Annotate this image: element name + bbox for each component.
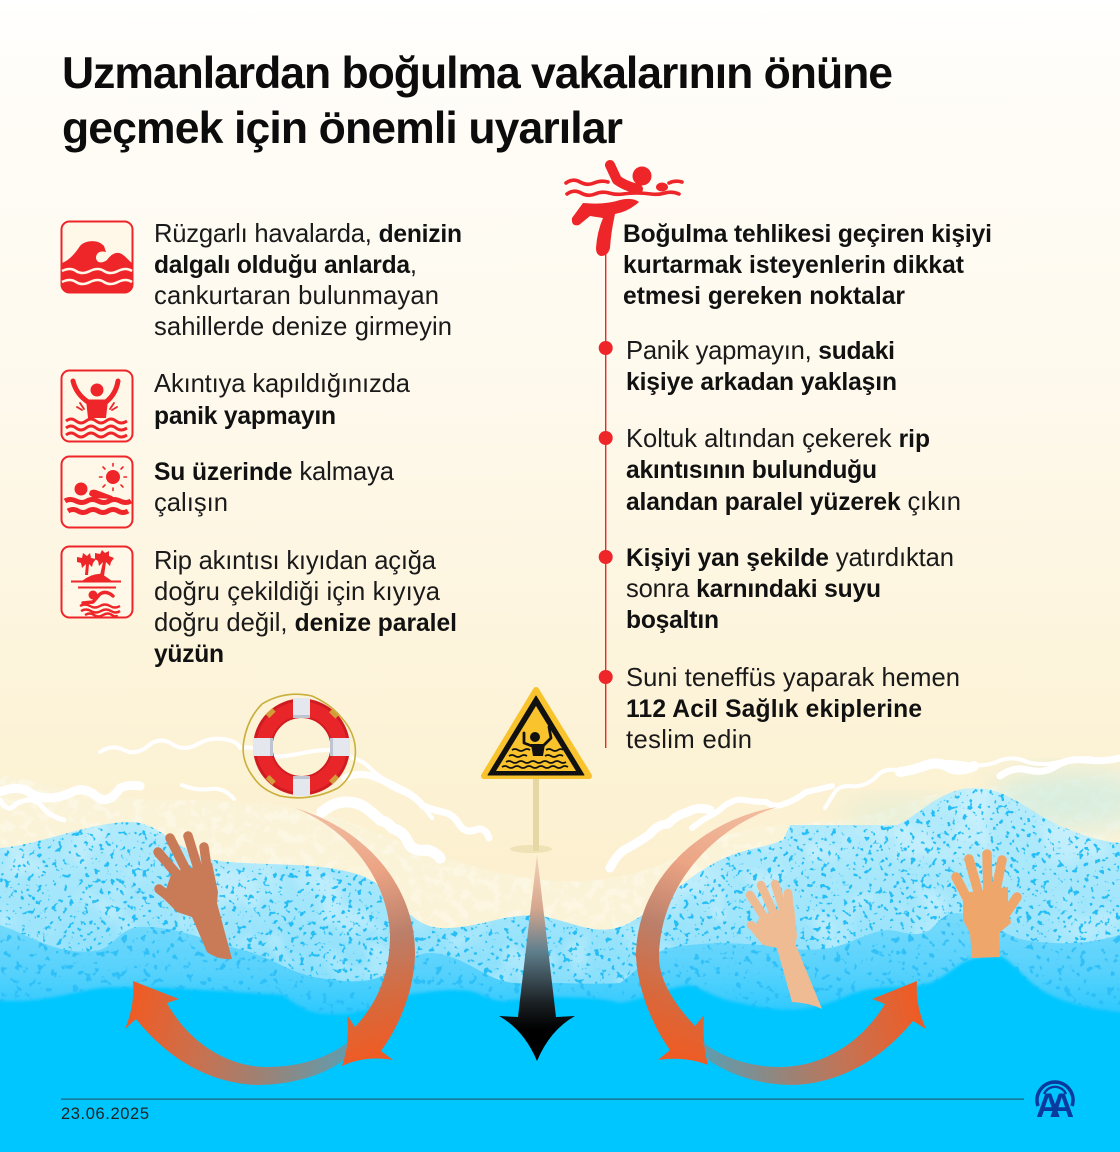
step 2: Koltuk altından çekerek rip: [626, 425, 930, 453]
title: Uzmanlardan boğulma vakalarının önüne: [62, 49, 893, 98]
step 4: 112 Acil Sağlık ekiplerine: [626, 696, 922, 723]
icon: lifebuoy: [243, 694, 355, 798]
warning 1 text: Rüzgarlı havalarda, denizin: [154, 220, 462, 248]
step 3: sonra karnındaki suyu: [626, 575, 881, 603]
title: [62, 49, 893, 153]
timeline line: [605, 230, 606, 748]
step 2: alandan paralel yüzerek çıkın: [626, 488, 961, 516]
step 1: Panik yapmayın, sudaki: [626, 337, 895, 365]
step 3: boşaltın: [626, 607, 719, 634]
logo: AA: AA: [1036, 1087, 1074, 1125]
warning 4 text: doğru çekildiği için kıyıya: [154, 578, 441, 606]
warning 3: floating swimmer icon: [62, 456, 132, 528]
arrow: left circular, downward: [295, 808, 415, 1066]
step 4: [599, 664, 960, 754]
panel: rescue heading: Boğulma tehlikesi geçiren kişiyi: [623, 221, 992, 248]
step 4: teslim edin: [626, 726, 752, 754]
hand: middle, light: [750, 884, 822, 1009]
mid-tone water: [0, 913, 1120, 1017]
icon: warning sign on post: [484, 690, 589, 853]
warning 3 text: [154, 458, 395, 517]
footer rule: [61, 1098, 1024, 1100]
warning 2 text: Akıntıya kapıldığınızda: [154, 370, 411, 398]
hand: left, brown: [158, 836, 232, 959]
panel: rescue heading: etmesi gereken noktalar: [623, 283, 905, 310]
light foam water: [0, 788, 1120, 984]
panel: rescue heading: [623, 221, 992, 310]
panel: rescue steps: [599, 337, 961, 754]
warning 1: wave icon: [62, 222, 132, 292]
step 3: [599, 544, 954, 634]
foam lines on the sand: [0, 739, 1120, 868]
arrow: left circular, upward: [125, 981, 348, 1085]
warning 4 text: doğru değil, denize paralel: [154, 609, 457, 637]
panel: rescue heading: kurtarmak isteyenlerin dikkat: [623, 252, 964, 279]
step 1: kişiye arkadan yaklaşın: [626, 369, 897, 396]
arrow: right circular, downward: [636, 807, 777, 1065]
panel: left warnings: [62, 220, 462, 668]
step 1: [599, 337, 897, 396]
date: 23.06.2025: [61, 1105, 149, 1123]
scene: sand and sea: [0, 739, 1120, 1152]
warning 3 text: Su üzerinde kalmaya: [154, 458, 395, 486]
deep water: [0, 956, 1120, 1152]
warning 3 text: çalışın: [154, 489, 228, 517]
arrow: central downward: [499, 855, 575, 1061]
warning 2 text: [154, 370, 411, 430]
hand: right, orange: [956, 854, 1017, 958]
warning 4: island and swimmer icon: [62, 546, 132, 618]
step 2: [599, 425, 961, 516]
warning 1 text: [154, 220, 462, 341]
title: geçmek için önemli uyarılar: [62, 104, 623, 153]
step 2: akıntısının bulunduğu: [626, 457, 877, 484]
step 4: Suni teneffüs yaparak hemen: [626, 664, 960, 692]
warning 2: person in water icon: [62, 370, 132, 442]
arrow: right circular, upward: [703, 981, 926, 1085]
warning 4 text: yüzün: [154, 641, 224, 668]
warning 4 text: Rip akıntısı kıyıdan açığa: [154, 547, 437, 575]
step 3: Kişiyi yan şekilde yatırdıktan: [626, 544, 954, 572]
warning 2 text: panik yapmayın: [154, 403, 336, 430]
warning 1 text: sahillerde denize girmeyin: [154, 313, 452, 341]
warning 1 text: cankurtaran bulunmayan: [154, 282, 439, 310]
warning 4 text: [154, 547, 457, 668]
warning 1 text: dalgalı olduğu anlarda,: [154, 251, 417, 279]
icon: drowning swimmer: [566, 165, 682, 256]
